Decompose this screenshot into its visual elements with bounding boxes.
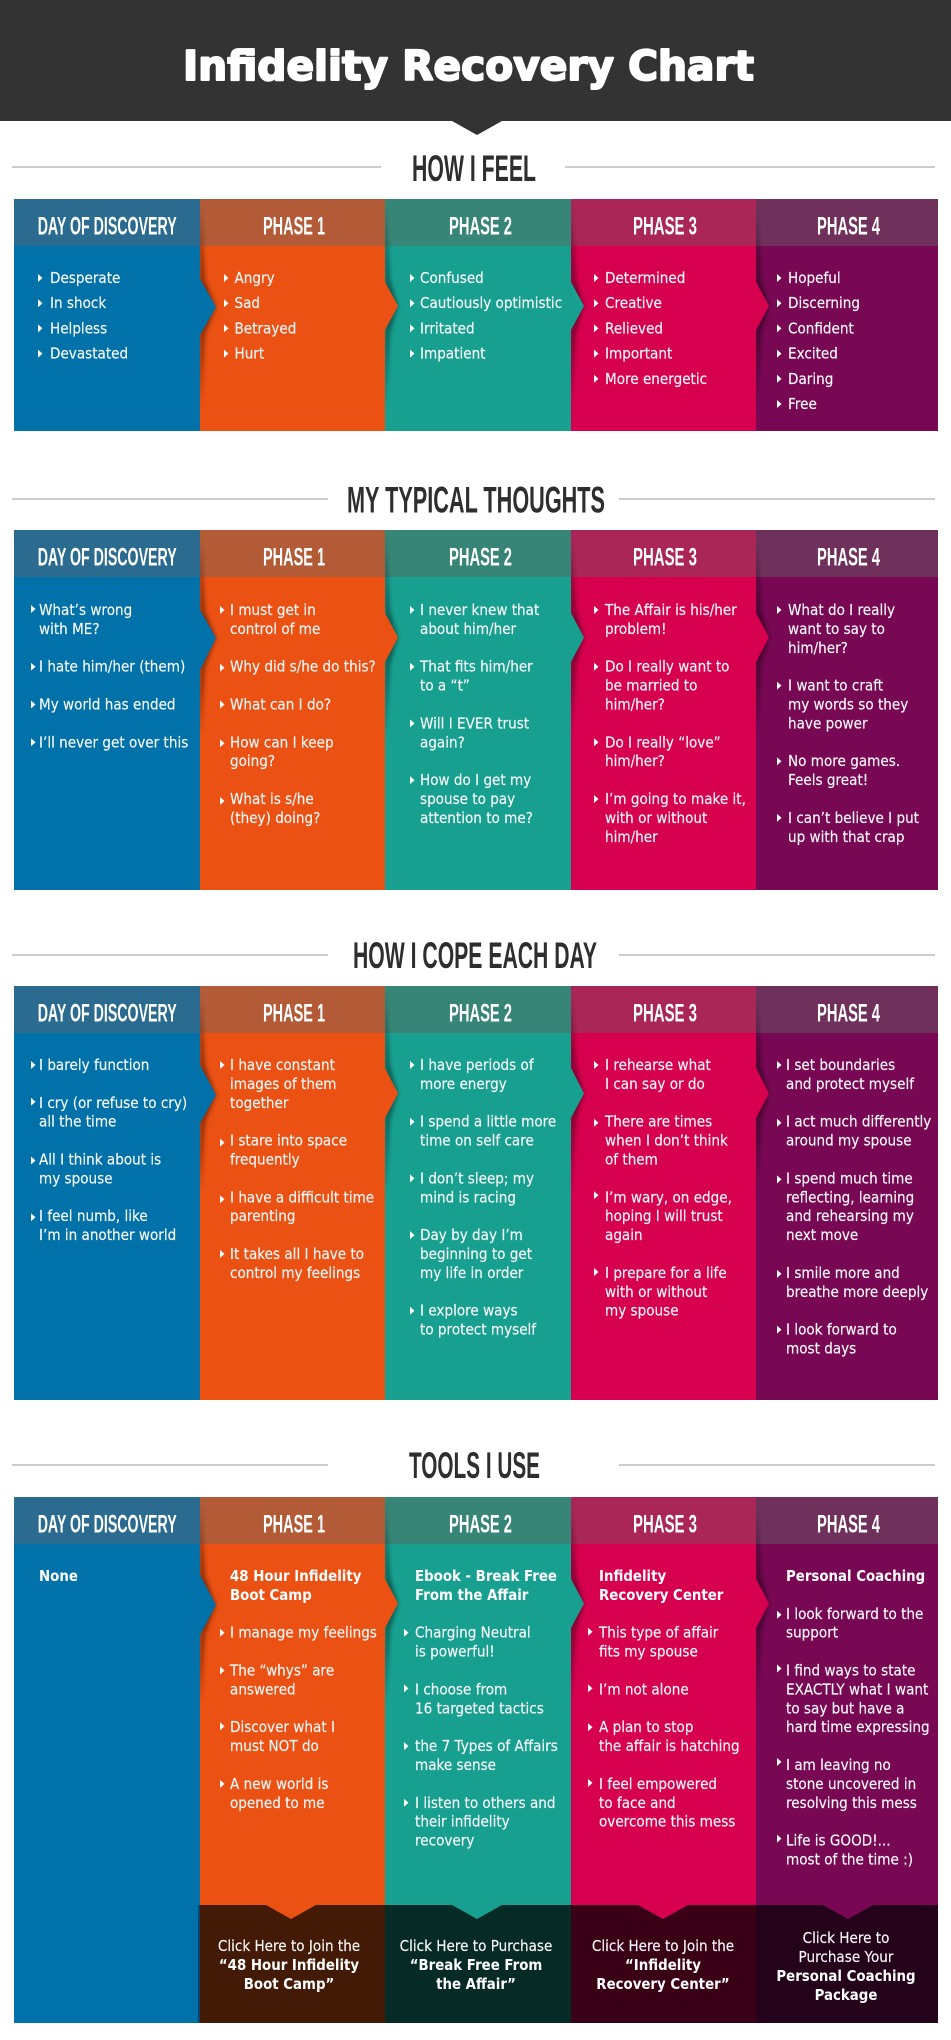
column: phase 2 tools: recovery <box>415 1833 475 1850</box>
column: day of discovery feelings: DAY OF DISCOVERY <box>38 212 177 240</box>
column: phase 1 tools: Boot Camp <box>230 1587 312 1604</box>
column: phase 3 thoughts: problem! <box>605 621 667 638</box>
column: phase 3 coping: I rehearse what <box>605 1057 711 1074</box>
column: day of discovery tools: DAY OF DISCOVERY <box>38 1510 177 1538</box>
column: phase 3 tools <box>571 1497 769 2023</box>
column: phase 1 thoughts: (they) doing? <box>230 810 320 827</box>
column: phase 1 thoughts: I must get in <box>230 602 316 619</box>
column: phase 1 thoughts: control of me <box>230 621 320 638</box>
column: phase 1 thoughts: What can I do? <box>230 697 331 714</box>
heading: my typical thoughts: MY TYPICAL THOUGHTS <box>347 479 605 521</box>
column: day of discovery feelings: Desperate <box>50 270 121 287</box>
column: day of discovery tools <box>14 1497 216 2023</box>
column: phase 3 coping: I’m wary, on edge, <box>605 1190 732 1206</box>
title banner <box>0 0 951 135</box>
column: phase 2 tools: the 7 Types of Affairs <box>415 1739 558 1755</box>
column: phase 4 tools: Personal Coaching <box>786 1568 925 1585</box>
column: phase 2 thoughts: Will I EVER trust <box>420 716 529 733</box>
call to action: break free from the affair: Click Here to Purchase <box>400 1938 553 1955</box>
call to action: 48 hour infidelity boot camp: Click Here to Join the <box>218 1938 360 1955</box>
column: phase 2 feelings: Confused <box>420 270 484 287</box>
column: day of discovery coping <box>14 986 216 1400</box>
column: phase 4 tools: PHASE 4 <box>817 1510 880 1538</box>
column: phase 2 tools: Ebook - Break Free <box>415 1568 557 1585</box>
column: phase 4 coping: I look forward to <box>786 1322 897 1339</box>
column: phase 3 coping: of them <box>605 1152 658 1169</box>
column: phase 4 coping: around my spouse <box>786 1133 912 1150</box>
column: phase 4 tools: support <box>786 1625 838 1642</box>
column: phase 2 coping: Day by day I’m <box>420 1228 523 1244</box>
column: phase 2 feelings: Irritated <box>420 321 475 338</box>
column: phase 1 tools: answered <box>230 1682 296 1699</box>
column: phase 1 thoughts: What is s/he <box>230 791 314 808</box>
column: phase 1 thoughts: PHASE 1 <box>263 544 325 572</box>
call to action: infidelity recovery center: “Infidelity <box>625 1957 701 1974</box>
column: phase 4 tools: to say but have a <box>786 1701 904 1717</box>
column: phase 3 coping: again <box>605 1228 643 1244</box>
column: phase 4 tools: most of the time :) <box>786 1852 913 1869</box>
column: phase 3 tools: Infidelity <box>599 1568 666 1585</box>
column: phase 1 coping: It takes all I have to <box>230 1246 364 1263</box>
column: phase 3 coping: when I don’t think <box>605 1133 729 1150</box>
call to action: infidelity recovery center: Click Here to Join the <box>592 1938 734 1955</box>
column: day of discovery thoughts: I’ll never get over this <box>39 735 188 751</box>
column: phase 2 thoughts: attention to me? <box>420 810 533 827</box>
column: phase 1 feelings: Angry <box>234 270 275 287</box>
column: day of discovery thoughts: DAY OF DISCOVERY <box>38 544 177 572</box>
column: phase 1 tools: opened to me <box>230 1795 325 1812</box>
column: day of discovery coping: I feel numb, like <box>39 1209 148 1225</box>
column: phase 2 tools: From the Affair <box>415 1587 528 1604</box>
column: phase 4 thoughts: No more games. <box>788 754 900 770</box>
column: day of discovery coping: All I think about is <box>39 1152 161 1169</box>
column: phase 3 tools: I’m not alone <box>599 1682 689 1699</box>
column: phase 1 coping: parenting <box>230 1209 295 1225</box>
column: day of discovery thoughts: What’s wrong <box>39 602 132 619</box>
column: phase 4 coping: PHASE 4 <box>817 1000 880 1028</box>
column: phase 4 feelings: Confident <box>788 321 854 338</box>
column: phase 2 coping: I explore ways <box>420 1303 518 1320</box>
column: phase 4 thoughts: Feels great! <box>788 773 868 789</box>
column: phase 1 coping: control my feelings <box>230 1265 360 1282</box>
column: day of discovery thoughts: with ME? <box>39 621 100 638</box>
column: phase 1 tools: Discover what I <box>230 1720 335 1736</box>
column: phase 2 coping: beginning to get <box>420 1246 532 1263</box>
column: phase 4 thoughts <box>756 530 938 890</box>
column: phase 3 feelings <box>571 199 769 431</box>
column: phase 2 tools: make sense <box>415 1757 496 1774</box>
column: phase 4 coping: I smile more and <box>786 1265 900 1282</box>
column: phase 2 feelings: Cautiously optimistic <box>420 296 562 312</box>
column: phase 4 coping: I act much differently <box>786 1114 932 1131</box>
column: phase 4 feelings: Daring <box>788 371 833 388</box>
column: phase 3 tools: overcome this mess <box>599 1814 735 1831</box>
section: my typical thoughts <box>12 479 938 890</box>
heading: how I cope each day: HOW I COPE EACH DAY <box>353 934 597 976</box>
column: phase 4 tools: hard time expressing <box>786 1720 930 1736</box>
column: day of discovery thoughts <box>14 530 216 890</box>
column: phase 2 tools: 16 targeted tactics <box>415 1701 544 1717</box>
title: Infidelity Recovery Chart <box>183 42 754 90</box>
column: phase 2 tools: I choose from <box>415 1682 507 1699</box>
column: phase 4 feelings: Hopeful <box>788 270 841 287</box>
column: phase 3 coping: hoping I will trust <box>605 1209 723 1225</box>
column: phase 4 feelings <box>756 199 938 431</box>
column: phase 4 thoughts: him/her? <box>788 640 848 657</box>
column: phase 3 feelings: Determined <box>605 270 685 287</box>
column: phase 2 tools: Charging Neutral <box>415 1625 531 1642</box>
column: phase 3 tools: A plan to stop <box>599 1720 693 1736</box>
column: phase 1 coping: PHASE 1 <box>263 1000 325 1028</box>
column: phase 3 coping: with or without <box>605 1284 708 1301</box>
column: phase 1 coping: I stare into space <box>230 1133 347 1150</box>
column: phase 3 tools: Recovery Center <box>599 1587 723 1604</box>
column: phase 2 coping: mind is racing <box>420 1190 516 1206</box>
column: phase 1 tools: 48 Hour Infidelity <box>230 1568 361 1585</box>
call to action: 48 hour infidelity boot camp: Boot Camp” <box>244 1976 334 1993</box>
column: phase 2 coping: to protect myself <box>420 1322 537 1339</box>
column: phase 1 thoughts <box>200 530 398 890</box>
column: phase 2 coping <box>385 986 584 1400</box>
column: phase 4 coping: reflecting, learning <box>786 1190 914 1206</box>
column: phase 4 thoughts: have power <box>788 716 868 733</box>
column: phase 3 coping <box>571 986 769 1400</box>
column: phase 2 thoughts: spouse to pay <box>420 791 516 808</box>
column: phase 4 thoughts: What do I really <box>788 602 896 619</box>
column: phase 3 thoughts: Do I really want to <box>605 659 729 676</box>
column: phase 2 coping: time on self care <box>420 1133 534 1150</box>
column: phase 4 coping <box>756 986 938 1400</box>
column: phase 4 tools <box>756 1497 938 2023</box>
column: phase 3 feelings: PHASE 3 <box>633 212 697 240</box>
column: phase 3 tools: to face and <box>599 1795 676 1812</box>
column: phase 2 tools: I listen to others and <box>415 1795 555 1812</box>
column: phase 4 thoughts: up with that crap <box>788 829 904 846</box>
column: phase 3 coping: There are times <box>604 1114 712 1131</box>
column: phase 2 thoughts: How do I get my <box>420 773 532 789</box>
column: phase 4 feelings: Discerning <box>788 296 860 312</box>
column: phase 2 tools: their infidelity <box>415 1814 510 1831</box>
column: phase 4 coping: I spend much time <box>786 1171 913 1188</box>
column: phase 2 thoughts: I never knew that <box>420 602 540 619</box>
column: phase 1 tools: A new world is <box>230 1776 328 1793</box>
column: phase 2 thoughts: That fits him/her <box>419 659 533 676</box>
column: phase 1 tools <box>200 1497 398 2023</box>
column: day of discovery feelings <box>14 199 216 431</box>
column: phase 1 feelings: Betrayed <box>234 321 296 338</box>
column: phase 4 feelings: PHASE 4 <box>817 212 880 240</box>
column: day of discovery tools: None <box>39 1568 78 1585</box>
column: day of discovery feelings: Helpless <box>50 321 107 338</box>
column: phase 4 coping: breathe more deeply <box>786 1284 929 1301</box>
column: phase 1 coping: I have constant <box>230 1057 335 1074</box>
column: phase 2 thoughts: to a “t” <box>420 678 470 695</box>
column: phase 2 feelings <box>385 199 584 431</box>
column: phase 3 thoughts: be married to <box>605 678 697 695</box>
column: day of discovery feelings: In shock <box>50 296 107 312</box>
column: phase 3 feelings: More energetic <box>605 371 707 388</box>
column: day of discovery thoughts: I hate him/her (them) <box>39 659 185 676</box>
column: phase 3 thoughts: with or without <box>605 810 708 827</box>
column: phase 1 thoughts: going? <box>230 754 275 770</box>
column: phase 4 thoughts: I can’t believe I put <box>788 810 919 827</box>
column: phase 3 thoughts: him/her? <box>605 754 665 770</box>
column: phase 1 thoughts: Why did s/he do this? <box>230 659 376 676</box>
column: day of discovery coping: DAY OF DISCOVERY <box>38 1000 177 1028</box>
section: how I feel <box>12 147 938 431</box>
column: phase 3 tools: the affair is hatching <box>599 1739 740 1755</box>
column: phase 4 tools: I find ways to state <box>786 1663 916 1680</box>
column: phase 1 coping: images of them <box>230 1076 337 1093</box>
call to action: personal coaching: Package <box>815 1987 877 2004</box>
column: phase 1 coping: together <box>230 1095 289 1112</box>
column: phase 4 thoughts: want to say to <box>788 621 885 638</box>
column: day of discovery coping: my spouse <box>39 1171 113 1188</box>
column: phase 3 thoughts: Do I really “love” <box>605 735 721 751</box>
column: phase 2 feelings: Impatient <box>420 346 486 363</box>
column: phase 2 feelings: PHASE 2 <box>449 212 512 240</box>
call to action: personal coaching <box>756 1905 938 2023</box>
column: phase 4 tools: resolving this mess <box>786 1795 917 1812</box>
column: phase 2 coping: I don’t sleep; my <box>420 1171 535 1188</box>
column: phase 3 thoughts: him/her <box>605 829 658 846</box>
column: phase 1 coping: frequently <box>230 1152 300 1169</box>
column: phase 2 thoughts: PHASE 2 <box>449 544 512 572</box>
column: phase 4 thoughts: my words so they <box>788 697 909 714</box>
column: day of discovery coping: I barely function <box>39 1057 149 1074</box>
column: phase 2 thoughts: about him/her <box>420 621 516 638</box>
column: phase 4 coping: I set boundaries <box>786 1057 895 1074</box>
column: phase 1 feelings: PHASE 1 <box>263 212 325 240</box>
section: tools I use <box>12 1444 938 2023</box>
column: phase 3 tools: This type of affair <box>598 1625 718 1642</box>
column: phase 4 tools: EXACTLY what I want <box>786 1682 929 1699</box>
column: phase 4 feelings: Excited <box>788 346 838 363</box>
column: phase 1 feelings <box>200 199 398 431</box>
column: phase 2 thoughts: again? <box>420 735 465 751</box>
column: phase 4 tools: Life is GOOD!... <box>786 1833 891 1850</box>
column: phase 2 coping: PHASE 2 <box>449 1000 512 1028</box>
heading: how I feel: HOW I FEEL <box>412 147 536 189</box>
column: phase 4 tools: I am leaving no <box>786 1757 891 1774</box>
column: phase 4 coping: most days <box>786 1341 856 1358</box>
call to action: personal coaching: Click Here to <box>803 1930 889 1947</box>
column: phase 3 thoughts: him/her? <box>605 697 665 714</box>
column: phase 4 thoughts: PHASE 4 <box>817 544 880 572</box>
column: phase 2 tools: PHASE 2 <box>449 1510 512 1538</box>
column: phase 2 thoughts <box>385 530 584 890</box>
column: phase 4 feelings: Free <box>788 396 817 413</box>
call to action: 48 hour infidelity boot camp: “48 Hour Infidelity <box>219 1957 359 1974</box>
call to action: personal coaching: Purchase Your <box>799 1949 894 1966</box>
column: day of discovery coping: I cry (or refuse to cry) <box>39 1095 187 1112</box>
column: phase 1 tools: must NOT do <box>230 1739 319 1755</box>
column: phase 1 tools: I manage my feelings <box>230 1625 377 1642</box>
column: phase 3 coping: I can say or do <box>605 1076 705 1093</box>
call to action: 48 hour infidelity boot camp <box>200 1905 385 2023</box>
column: phase 2 coping: my life in order <box>420 1265 524 1282</box>
column: day of discovery feelings: Devastated <box>50 346 128 363</box>
column: phase 3 feelings: Important <box>605 346 673 363</box>
column: phase 3 thoughts: PHASE 3 <box>633 544 697 572</box>
call to action: infidelity recovery center: Recovery Center” <box>596 1976 730 1993</box>
column: phase 4 coping: and rehearsing my <box>786 1209 914 1225</box>
column: phase 3 tools: I feel empowered <box>599 1776 717 1793</box>
column: phase 3 tools: PHASE 3 <box>633 1510 697 1538</box>
column: phase 3 thoughts: The Affair is his/her <box>604 602 737 619</box>
call to action: infidelity recovery center <box>571 1905 756 2023</box>
column: phase 2 coping: I spend a little more <box>420 1114 556 1131</box>
column: phase 1 feelings: Hurt <box>234 346 265 363</box>
column: phase 1 feelings: Sad <box>234 296 260 312</box>
column: phase 2 tools: is powerful! <box>415 1644 495 1661</box>
column: phase 4 tools: stone uncovered in <box>786 1776 916 1793</box>
column: phase 1 coping: I have a difficult time <box>230 1190 374 1206</box>
column: phase 2 tools <box>385 1497 584 2023</box>
call to action: break free from the affair <box>385 1905 571 2023</box>
column: phase 3 coping: PHASE 3 <box>633 1000 697 1028</box>
column: phase 4 thoughts: I want to craft <box>788 678 883 695</box>
column: phase 1 coping <box>200 986 398 1400</box>
column: phase 3 tools: fits my spouse <box>599 1644 698 1661</box>
column: phase 3 feelings: Relieved <box>605 321 663 338</box>
column: phase 2 coping: I have periods of <box>420 1057 535 1074</box>
column: phase 2 coping: more energy <box>420 1076 507 1093</box>
column: day of discovery coping: I’m in another world <box>39 1228 176 1244</box>
call to action: personal coaching: Personal Coaching <box>776 1968 916 1985</box>
column: phase 1 thoughts: How can I keep <box>230 735 334 751</box>
section: how I cope each day <box>12 934 938 1400</box>
column: phase 1 tools: PHASE 1 <box>263 1510 325 1538</box>
call to action: break free from the affair: “Break Free From <box>410 1957 542 1974</box>
column: phase 3 coping: my spouse <box>605 1303 679 1320</box>
call to action: break free from the affair: the Affair” <box>436 1976 516 1993</box>
column: phase 1 tools: The “whys” are <box>229 1663 334 1680</box>
column: phase 3 coping: I prepare for a life <box>605 1265 727 1282</box>
column: phase 4 tools: I look forward to the <box>786 1606 924 1623</box>
column: phase 4 coping: and protect myself <box>786 1076 915 1093</box>
column: phase 3 thoughts <box>571 530 769 890</box>
column: phase 4 coping: next move <box>786 1228 858 1244</box>
column: day of discovery coping: all the time <box>39 1114 117 1131</box>
heading: tools I use: TOOLS I USE <box>409 1444 540 1486</box>
column: phase 3 thoughts: I’m going to make it, <box>605 791 746 808</box>
column: day of discovery thoughts: My world has ended <box>39 697 176 714</box>
column: phase 3 feelings: Creative <box>605 296 662 312</box>
